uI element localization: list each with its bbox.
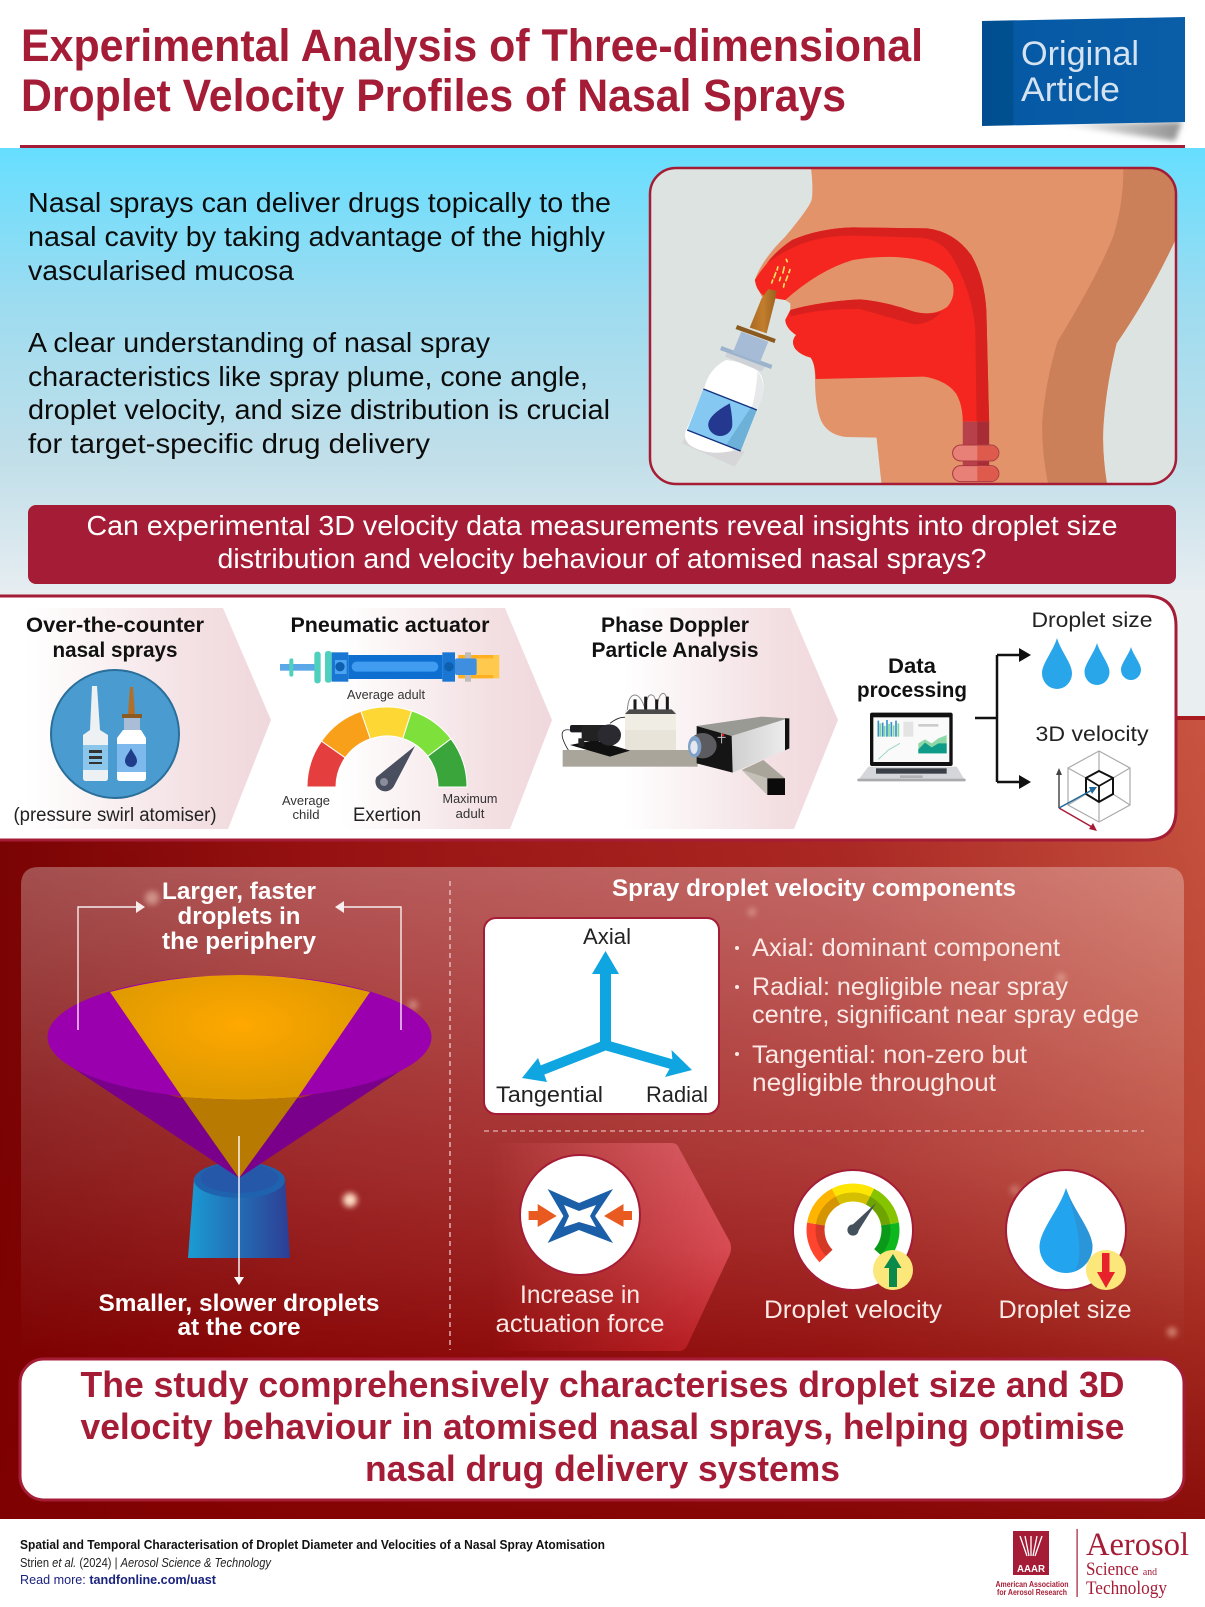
label: larger faster droplets: droplets in bbox=[178, 903, 300, 930]
question banner bbox=[28, 505, 1176, 584]
sky background panel bbox=[0, 148, 1205, 598]
label: smaller slower droplets bbox=[98, 1290, 380, 1341]
chevron: increase in actuation force: actuation force bbox=[496, 1310, 664, 1338]
step: pneumatic actuator: Pneumatic actuator bbox=[290, 614, 490, 637]
output: droplet size bbox=[1032, 609, 1152, 689]
citation: Spatial and Temporal Characterisation of Droplet Diameter and Velocities of a Nasal Spray Atomisation bbox=[20, 1537, 605, 1552]
intro text: Nasal sprays can deliver drugs topically to the bbox=[28, 187, 611, 218]
chevron: increase in actuation force bbox=[490, 1143, 731, 1351]
step: pneumatic actuator: child bbox=[292, 808, 320, 822]
footer background bbox=[0, 1519, 1205, 1607]
label: smaller slower droplets: Smaller, slower droplets bbox=[98, 1290, 380, 1317]
intro text: for target-specific drug delivery bbox=[28, 428, 430, 459]
icon: actuator bbox=[280, 651, 499, 683]
icon: compression bbox=[520, 1155, 640, 1275]
step: pneumatic actuator: Maximum bbox=[442, 792, 498, 806]
chevron: increase in actuation force: Increase in bbox=[520, 1281, 640, 1309]
illustration: nasal cavity with spray bbox=[650, 165, 1181, 485]
intro text bbox=[28, 187, 611, 459]
diagram: velocity axes: Radial bbox=[646, 1082, 708, 1107]
title: Experimental Analysis of Three-dimensional bbox=[21, 20, 923, 71]
diagram: velocity axes: Axial bbox=[583, 924, 631, 949]
output: 3D velocity: 3D velocity bbox=[1036, 723, 1149, 746]
step: over-the-counter sprays: (pressure swirl atomiser) bbox=[14, 805, 216, 826]
panel: translucent findings bbox=[21, 867, 1184, 1360]
citation: Read more: tandfonline.com/uast bbox=[20, 1572, 217, 1587]
label: larger faster droplets: the periphery bbox=[162, 928, 317, 955]
logo: Aerosol Science and Technology: Science and bbox=[1086, 1559, 1157, 1580]
badge: original article bbox=[982, 17, 1185, 141]
logo: Aerosol Science and Technology: Technology bbox=[1086, 1578, 1167, 1599]
output: droplet size: Droplet size bbox=[1032, 609, 1152, 632]
output: 3D velocity bbox=[1036, 723, 1149, 831]
intro text: A clear understanding of nasal spray bbox=[28, 327, 490, 358]
question banner: distribution and velocity behaviour of atomised nasal sprays? bbox=[218, 543, 986, 574]
arrows: periphery bbox=[78, 901, 401, 1030]
step: data processing bbox=[857, 655, 967, 781]
bullets: velocity components: negligible throughout bbox=[752, 1069, 996, 1097]
logo: AAAR: AAAR bbox=[1017, 1564, 1046, 1575]
logo: Aerosol Science and Technology bbox=[1076, 1527, 1189, 1599]
logo: AAAR bbox=[996, 1531, 1069, 1597]
step: over-the-counter sprays bbox=[14, 614, 216, 826]
bullets: velocity components bbox=[735, 934, 1139, 1097]
title: Droplet Velocity Profiles of Nasal Sprays bbox=[21, 70, 846, 121]
conclusion box bbox=[20, 1359, 1184, 1500]
step: phase doppler particle analysis: Phase Doppler bbox=[601, 614, 749, 637]
step: phase doppler particle analysis bbox=[562, 614, 789, 795]
icon: nasal spray bottle bbox=[682, 289, 777, 467]
intro text: characteristics like spray plume, cone angle, bbox=[28, 361, 588, 392]
divider bbox=[449, 881, 451, 1350]
bullets: velocity components: centre, significant near spray edge bbox=[752, 1001, 1139, 1029]
conclusion box: The study comprehensively characterises droplet size and 3D bbox=[80, 1364, 1124, 1405]
citation bbox=[20, 1537, 605, 1587]
step: data processing: processing bbox=[857, 679, 967, 702]
heading: velocity components: Spray droplet velocity components bbox=[612, 875, 1016, 902]
panel: workflow bbox=[0, 596, 1176, 840]
label: droplet size: Droplet size bbox=[998, 1296, 1132, 1324]
intro text: droplet velocity, and size distribution is crucial bbox=[28, 394, 610, 425]
bullets: velocity components: Axial: dominant component bbox=[752, 934, 1060, 962]
arrow: core bbox=[234, 1136, 244, 1285]
bullets: velocity components: Radial: negligible near spray bbox=[752, 973, 1068, 1001]
intro text: vascularised mucosa bbox=[28, 255, 294, 286]
step: pneumatic actuator bbox=[280, 614, 499, 826]
logo: AAAR: for Aerosol Research bbox=[997, 1588, 1067, 1597]
step: pneumatic actuator: Exertion bbox=[353, 805, 421, 826]
intro text: nasal cavity by taking advantage of the highly bbox=[28, 221, 605, 252]
step: data processing: Data bbox=[888, 655, 936, 678]
icon: droplet size drop bbox=[1006, 1170, 1126, 1290]
chevron 3 bbox=[600, 608, 838, 829]
badge: original article: Original bbox=[1021, 35, 1139, 73]
bullets: velocity components: Tangential: non-zero but bbox=[752, 1041, 1027, 1069]
logo: Aerosol Science and Technology: Aerosol bbox=[1086, 1527, 1189, 1563]
icon: PDPA instruments bbox=[562, 693, 789, 795]
spray cone diagram bbox=[48, 975, 432, 1258]
step: phase doppler particle analysis: Particle Analysis bbox=[592, 639, 758, 662]
header background bbox=[0, 0, 1205, 148]
diagram: velocity axes: Tangential bbox=[496, 1082, 603, 1107]
right strip behind workflow bbox=[0, 590, 1205, 720]
question banner: Can experimental 3D velocity data measurements reveal insights into droplet size bbox=[86, 510, 1118, 541]
step: pneumatic actuator: Average adult bbox=[347, 688, 426, 702]
citation: Strien et al. (2024) | Aerosol Science & Technology bbox=[20, 1555, 272, 1570]
chevron 1 bbox=[0, 608, 271, 829]
icon: laptop bbox=[857, 713, 966, 781]
icon: droplet velocity gauge bbox=[793, 1170, 913, 1290]
conclusion box: nasal drug delivery systems bbox=[365, 1448, 840, 1489]
logo: AAAR: American Association bbox=[996, 1580, 1069, 1589]
step: pneumatic actuator: Average bbox=[282, 794, 330, 808]
red textured background bbox=[0, 716, 1205, 1520]
label: droplet velocity: Droplet velocity bbox=[764, 1296, 943, 1324]
label: larger faster droplets: Larger, faster bbox=[162, 878, 316, 905]
diagram: velocity axes bbox=[484, 918, 719, 1114]
title bbox=[21, 20, 923, 121]
gauge: exertion bbox=[307, 707, 467, 791]
chevron 2 bbox=[318, 608, 552, 829]
badge: original article: Article bbox=[1021, 71, 1120, 109]
label: larger faster droplets bbox=[162, 878, 317, 955]
arrows: data processing outputs bbox=[975, 648, 1031, 789]
label: smaller slower droplets: at the core bbox=[178, 1314, 300, 1341]
step: pneumatic actuator: adult bbox=[456, 807, 485, 821]
icon: nozzle bbox=[188, 1162, 290, 1258]
conclusion box: velocity behaviour in atomised nasal sprays, helping optimise bbox=[80, 1406, 1124, 1447]
step: over-the-counter sprays: nasal sprays bbox=[52, 639, 178, 662]
step: over-the-counter sprays: Over-the-counter bbox=[26, 614, 204, 637]
